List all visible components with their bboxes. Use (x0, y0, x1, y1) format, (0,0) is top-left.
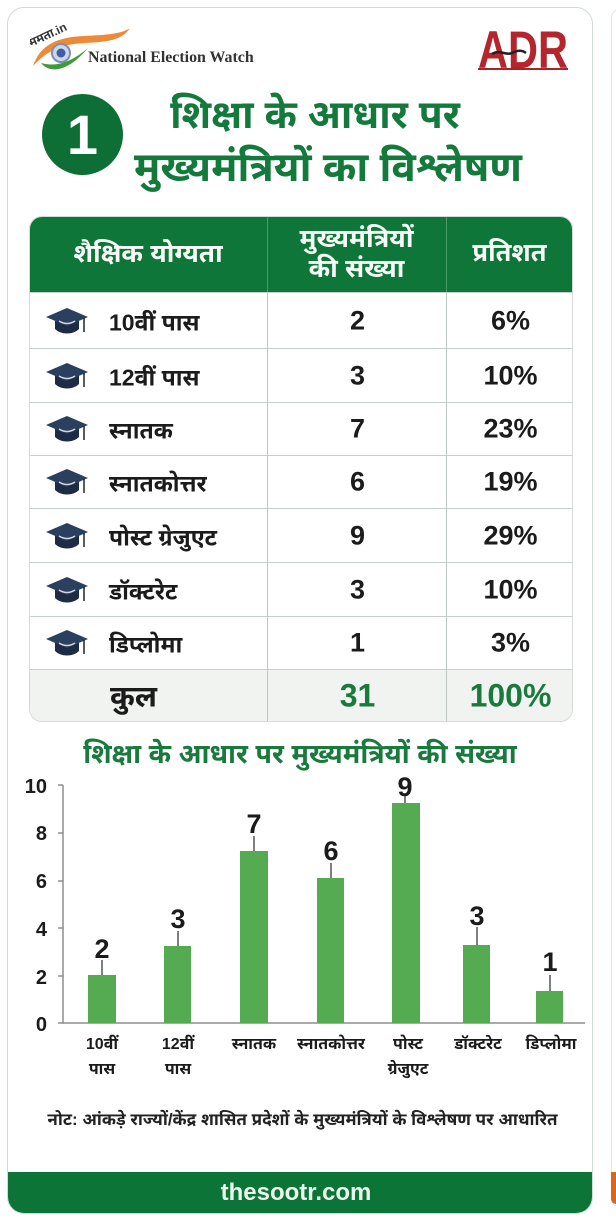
chart title: शिक्षा के आधार पर मुख्यमंत्रियों की संख्या (83, 739, 517, 769)
row: 12वीं पास (30, 348, 574, 402)
row: डॉक्टरेट: डॉक्टरेट (109, 578, 177, 604)
total row: कुल (110, 680, 157, 714)
y axis labels: 0 (36, 1014, 47, 1036)
table header: की संख्या (309, 253, 404, 283)
row: 12वीं पास: 10% (483, 360, 538, 390)
table header (29, 216, 573, 292)
logo: National Election Watch (30, 22, 254, 70)
footer bar (7, 1172, 593, 1214)
row: 12वीं पास: 3 (350, 360, 365, 390)
category labels (86, 1034, 577, 1079)
row: स्नातक (30, 402, 574, 455)
category labels: स्नातकोत्तर (297, 1035, 366, 1053)
row: डिप्लोमा: डिप्लोमा (109, 632, 182, 658)
row: डॉक्टरेट (30, 562, 574, 616)
row: 12वीं पास: 12वीं पास (109, 364, 200, 390)
number badge: 1 (67, 103, 98, 166)
row: डॉक्टरेट: 10% (483, 574, 538, 604)
y axis labels: 2 (36, 967, 47, 989)
row: 10वीं पास: 10वीं पास (109, 309, 200, 335)
row: स्नातकोत्तर: स्नातकोत्तर (109, 470, 207, 496)
row: पोस्ट ग्रेजुएट (30, 508, 574, 562)
category labels: स्नातक (232, 1036, 277, 1053)
row: पोस्ट ग्रेजुएट: पोस्ट ग्रेजुएट (109, 524, 217, 550)
y axis labels (25, 776, 48, 1036)
value labels: 3 (469, 901, 485, 931)
title: शिक्षा के आधार पर (170, 94, 460, 137)
next card edge (611, 8, 616, 1208)
category labels: ग्रेजुएट (388, 1059, 429, 1079)
bar chart (25, 772, 585, 1079)
row: स्नातकोत्तर (30, 455, 574, 508)
number badge (42, 94, 123, 175)
value labels: 1 (542, 947, 558, 977)
category labels: पास (89, 1061, 116, 1078)
title: मुख्यमंत्रियों का विश्लेषण (134, 144, 522, 190)
table header: प्रतिशत (472, 239, 547, 267)
row: 10वीं पास (30, 292, 574, 348)
y axis (58, 785, 585, 1023)
table (29, 216, 573, 722)
y axis labels: 4 (36, 919, 48, 941)
title (134, 92, 523, 192)
row: 10वीं पास: 2 (350, 305, 365, 335)
category labels: पास (165, 1061, 192, 1078)
category labels: 12वीं (162, 1034, 195, 1053)
row: डिप्लोमा: 3% (491, 628, 530, 658)
total row: 31 (340, 678, 375, 714)
row: पोस्ट ग्रेजुएट: 9 (350, 520, 365, 550)
value labels: 6 (323, 836, 339, 866)
next card footer sliver (611, 1172, 616, 1204)
note: नोट: आंकड़े राज्यों/केंद्र शासित प्रदेशों के मुख्यमंत्रियों के विश्लेषण पर आधारित (47, 1110, 558, 1129)
y axis labels: 6 (36, 871, 47, 893)
row: स्नातक: 23% (483, 414, 538, 444)
category labels: 10वीं (86, 1034, 119, 1053)
y axis labels: 8 (36, 823, 47, 845)
category labels: डिप्लोमा (526, 1035, 577, 1053)
row: डिप्लोमा (30, 616, 574, 669)
total row (30, 669, 574, 722)
value labels: 3 (170, 904, 186, 934)
category labels: पोस्ट (393, 1035, 423, 1053)
row: स्नातक: 7 (350, 414, 365, 444)
whiskers (102, 795, 550, 991)
category labels: डॉक्टरेट (453, 1034, 502, 1053)
table header: शैक्षिक योग्यता (73, 238, 223, 268)
row: स्नातकोत्तर: 6 (350, 466, 365, 496)
logo: National Election Watch: National Election Watch (88, 49, 254, 66)
row: डिप्लोमा: 1 (350, 628, 365, 658)
row: 10वीं पास: 6% (491, 305, 530, 335)
bars (88, 803, 563, 1023)
footer bar: thesootr.com (221, 1178, 371, 1206)
value labels: 7 (246, 809, 262, 839)
row: स्नातक: स्नातक (109, 418, 173, 444)
total row: 100% (470, 678, 551, 714)
row: डॉक्टरेट: 3 (350, 574, 365, 604)
value labels: 9 (397, 772, 413, 802)
row: स्नातकोत्तर: 19% (483, 466, 538, 496)
value labels: 2 (94, 934, 110, 964)
y axis labels: 10 (25, 776, 47, 798)
row: पोस्ट ग्रेजुएट: 29% (483, 520, 538, 550)
value labels (94, 772, 558, 977)
table header: मुख्यमंत्रियों (300, 223, 413, 253)
